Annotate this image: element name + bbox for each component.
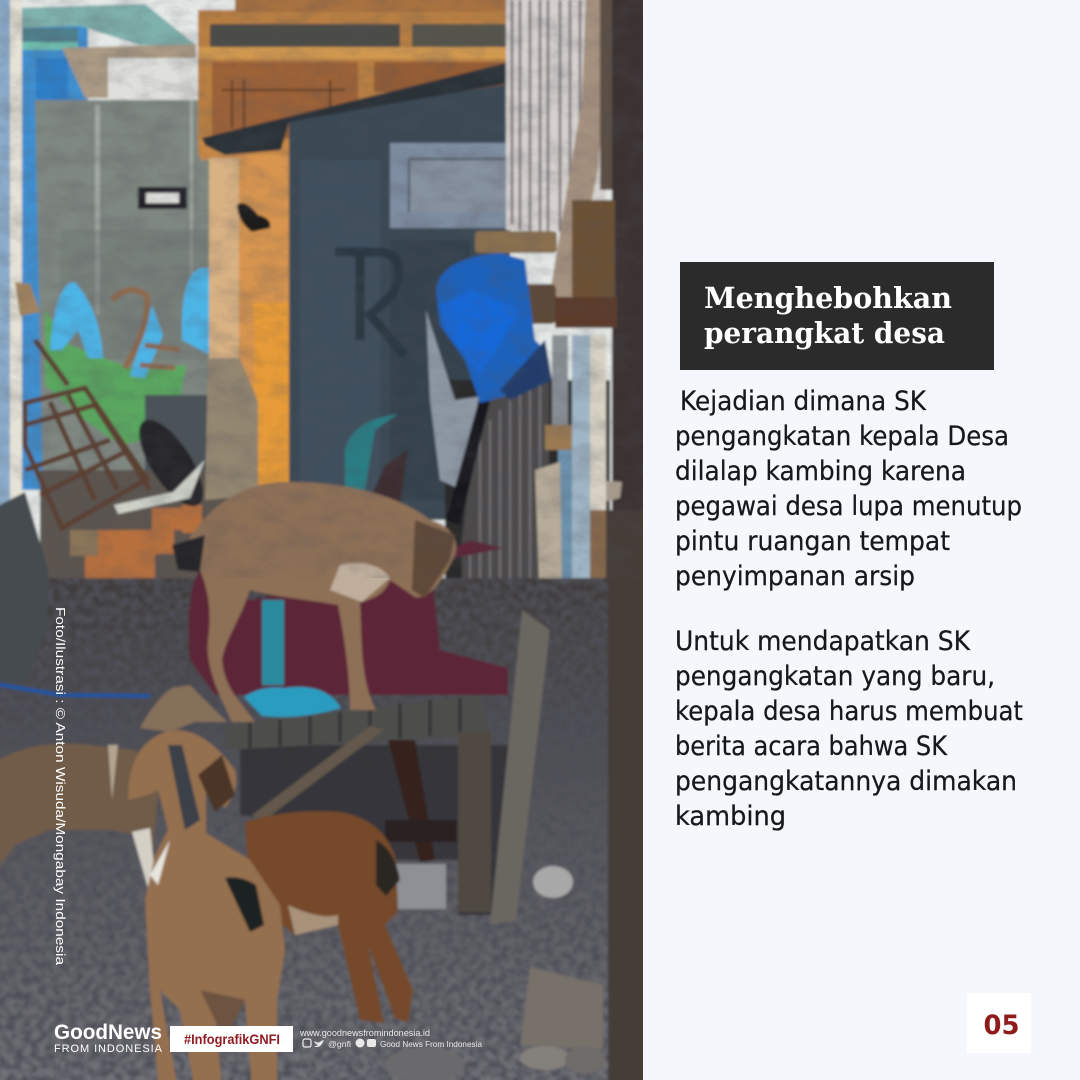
icon: twitter xyxy=(314,1040,324,1047)
icon: facebook xyxy=(356,1038,364,1048)
goat standing on bench xyxy=(178,482,456,722)
page number: 05 xyxy=(984,1010,1020,1041)
wheel xyxy=(138,419,204,508)
hashtag badge xyxy=(170,1026,293,1052)
panel: photo of goats in an alley xyxy=(0,0,662,1080)
grey graffiti wall xyxy=(35,100,210,490)
icon: youtube xyxy=(367,1039,376,1047)
left wall lower xyxy=(0,578,48,666)
lean-to strip xyxy=(490,610,550,925)
heading box xyxy=(680,262,994,370)
bench xyxy=(225,695,491,912)
left goat xyxy=(0,685,227,888)
left wall strip xyxy=(0,0,48,580)
paragraph 2: pengangkatannya dimakan xyxy=(675,766,1017,797)
blue house behind xyxy=(17,4,200,490)
blue cloth xyxy=(244,687,341,717)
logo: GoodNews from Indonesia: GoodNews xyxy=(54,1021,162,1044)
icon: instagram xyxy=(303,1039,311,1047)
paragraph 2: kambing xyxy=(675,801,786,832)
heading box: Menghebohkan xyxy=(704,281,952,315)
page number xyxy=(967,993,1031,1053)
stones xyxy=(385,967,605,1080)
rusty cart frame xyxy=(25,340,150,528)
upper wooden building xyxy=(198,0,510,155)
paragraph 1: pengangkatan kepala Desa xyxy=(675,421,1009,452)
orange wall, post and board xyxy=(200,140,293,500)
paragraph 1 xyxy=(675,386,1022,592)
social links xyxy=(299,1028,482,1049)
thatch panel and clutter xyxy=(447,334,608,580)
paragraph 2: kepala desa harus membuat xyxy=(675,696,1023,727)
blue tarp xyxy=(436,253,545,403)
corrugated panel xyxy=(506,0,611,305)
paragraph 2 xyxy=(675,626,1023,832)
front goat xyxy=(128,730,285,1080)
paragraph 1: pintu ruangan tempat xyxy=(675,526,950,557)
maroon chair xyxy=(189,540,508,695)
dark under-structure xyxy=(240,745,510,915)
brown goat xyxy=(245,811,413,1023)
paragraph 2: Untuk mendapatkan SK xyxy=(675,626,971,657)
paragraph 2: pengangkatan yang baru, xyxy=(675,661,995,692)
social links: www.goodnewsfromindonesia.id xyxy=(299,1028,430,1038)
social links: @gnfi xyxy=(328,1039,351,1049)
right post xyxy=(570,0,643,1080)
logo: GoodNews from Indonesia: FROM INDONESIA xyxy=(54,1043,163,1055)
dark shed xyxy=(202,62,510,520)
heading box: perangkat desa xyxy=(704,316,945,350)
rubble backdrop xyxy=(38,468,260,580)
grey sack xyxy=(424,310,481,488)
social links: Good News From Indonesia xyxy=(380,1039,482,1049)
paragraph 1: pegawai desa lupa menutup xyxy=(675,491,1022,522)
paragraph 2: berita acara bahwa SK xyxy=(675,731,948,762)
dark backdrop behind clutter xyxy=(443,378,612,580)
photo credit: Foto/Ilustrasi : © Anton Wisuda/Mongabay Indonesia xyxy=(53,607,68,966)
ground xyxy=(0,578,608,1080)
bricks xyxy=(70,505,202,578)
paragraph 1: penyimpanan arsip xyxy=(675,561,915,592)
hashtag badge: #InfografikGNFI xyxy=(184,1032,280,1047)
paragraph 1: dilalap kambing karena xyxy=(675,456,966,487)
paragraph 1: Kejadian dimana SK xyxy=(680,386,927,417)
logo: GoodNews from Indonesia xyxy=(54,1021,163,1055)
wooden logs xyxy=(475,231,617,328)
